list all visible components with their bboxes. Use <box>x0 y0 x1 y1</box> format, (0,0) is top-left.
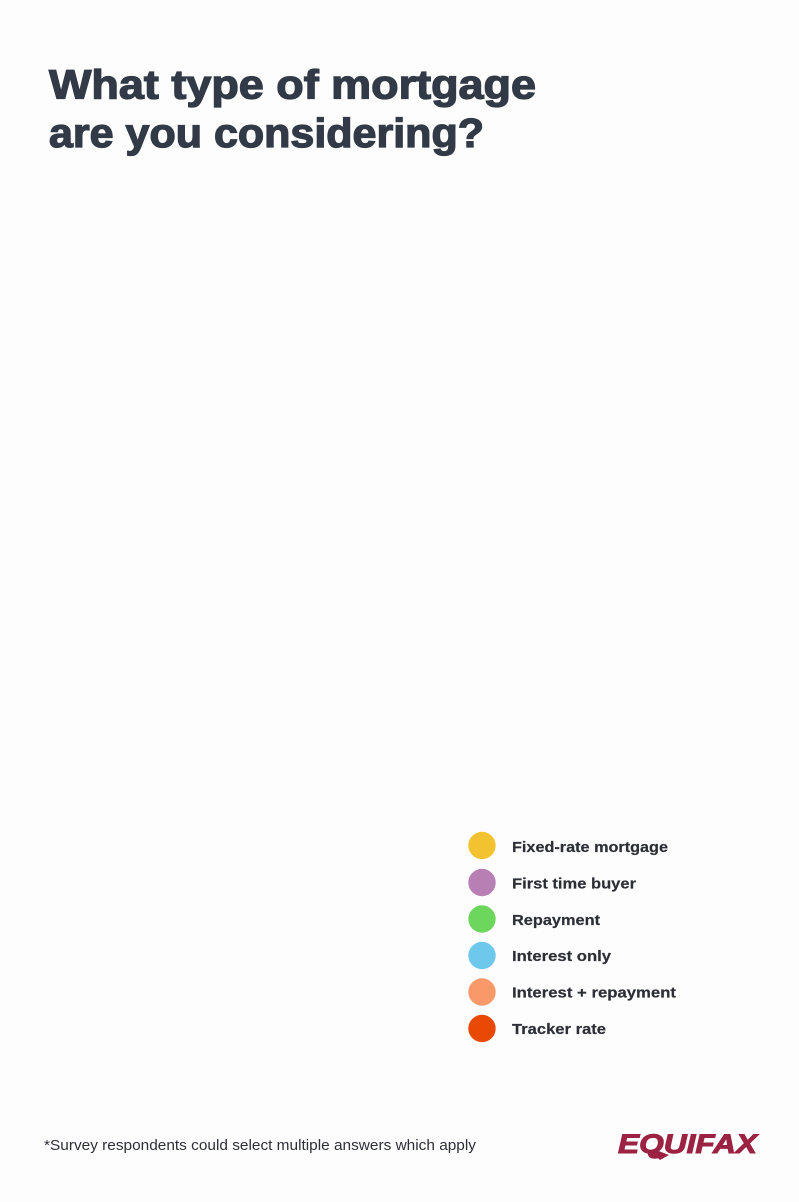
logo: Equifax: EQUIFAX <box>618 1129 759 1159</box>
legend item: interest only: Interest only <box>512 948 612 965</box>
legend item: first time buyer: First time buyer <box>512 876 636 892</box>
legend item: repayment: Repayment <box>512 912 600 929</box>
legend item: first time buyer <box>468 869 636 896</box>
title: What type of mortgage <box>49 62 536 108</box>
legend <box>468 832 676 1042</box>
legend item: tracker rate: Tracker rate <box>512 1021 606 1038</box>
footnote: *Survey respondents could select multiple answers which apply <box>44 1137 476 1154</box>
legend item: repayment <box>468 905 600 933</box>
legend item: interest + repayment <box>468 978 676 1006</box>
legend item: tracker rate <box>468 1015 606 1042</box>
legend item: interest + repayment: Interest + repayment <box>512 984 676 1002</box>
legend item: fixed-rate mortgage <box>468 832 668 859</box>
legend item: interest only <box>468 942 612 969</box>
title: are you considering? <box>49 110 484 156</box>
title <box>49 62 536 156</box>
legend item: fixed-rate mortgage: Fixed-rate mortgage <box>512 839 668 856</box>
